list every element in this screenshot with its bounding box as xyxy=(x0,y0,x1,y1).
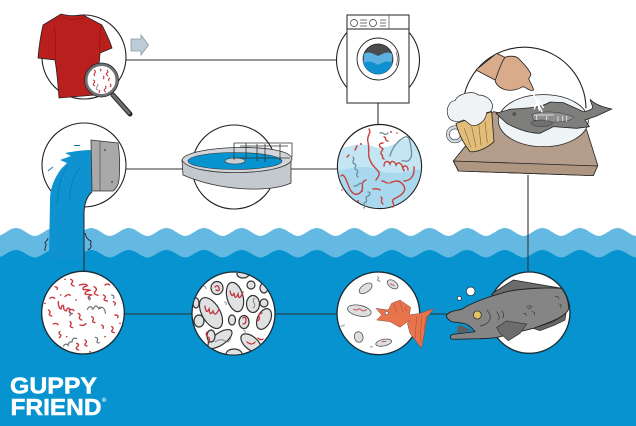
organism cells xyxy=(193,272,272,354)
t-shirt xyxy=(38,14,112,98)
shirt circle xyxy=(42,15,126,99)
tank rim xyxy=(182,147,292,173)
red fibres xyxy=(341,129,414,207)
panel: red t-shirt with magnifier xyxy=(38,14,130,114)
panel: treatment tank xyxy=(182,125,292,209)
tank wall xyxy=(182,150,291,189)
fish on plate xyxy=(496,99,612,133)
hand and arm xyxy=(476,53,534,90)
logo: Guppy Friend xyxy=(10,372,107,420)
grey fibres xyxy=(353,133,412,208)
washer circle xyxy=(336,18,420,102)
centre platform xyxy=(225,158,245,164)
washer door xyxy=(357,38,399,80)
small orange fish xyxy=(376,300,434,348)
shirt seams xyxy=(54,17,101,60)
red fibres xyxy=(48,279,118,350)
large fish circle xyxy=(489,272,570,353)
plate circle xyxy=(465,47,586,108)
pectoral fin xyxy=(497,321,527,341)
plate xyxy=(498,95,588,147)
arm crease xyxy=(495,57,505,80)
arrow icon xyxy=(131,35,148,55)
table xyxy=(453,112,598,176)
fish eye xyxy=(473,311,481,319)
water stream xyxy=(49,150,92,258)
fibres in lens xyxy=(93,69,111,93)
splash squiggles at surface xyxy=(45,233,91,251)
magnifier handle xyxy=(113,95,130,114)
beer foam xyxy=(447,93,492,126)
stream edge line xyxy=(84,192,92,271)
panel: bacteria and plankton xyxy=(192,270,275,359)
plankton cells xyxy=(346,278,400,348)
specks xyxy=(44,278,121,352)
sea circle xyxy=(42,271,124,354)
panel: wastewater pipe xyxy=(42,123,126,271)
logo: Guppy Friend: GUPPY xyxy=(10,372,97,398)
grey fibres xyxy=(63,295,114,346)
panel: washing machine xyxy=(336,15,420,103)
small organism circle xyxy=(337,272,420,355)
panel: microfibres in water xyxy=(335,124,425,212)
stream splash marks xyxy=(48,146,80,171)
water: light wave band xyxy=(0,228,636,270)
bridge frame xyxy=(234,143,292,162)
washer body xyxy=(347,29,409,103)
pipe circle xyxy=(42,123,126,207)
panel: fish on a plate with beer xyxy=(447,47,612,176)
circle background xyxy=(338,124,422,208)
pipe outlet xyxy=(91,140,120,191)
plankton circle xyxy=(192,272,275,355)
pipe details xyxy=(99,141,101,191)
fork xyxy=(531,88,543,112)
bubbles xyxy=(457,287,475,300)
stream inner lines xyxy=(57,165,80,205)
water: deep sea xyxy=(0,250,636,426)
tank water xyxy=(188,152,282,170)
washer control panel xyxy=(347,15,409,29)
large fish xyxy=(447,280,569,341)
logo: Guppy Friend: ® xyxy=(102,397,107,404)
specks xyxy=(341,131,398,202)
fibres in plankton xyxy=(353,283,395,342)
logo: Guppy Friend: FRIEND xyxy=(10,394,101,420)
beer mug xyxy=(447,93,494,152)
connector lines xyxy=(124,60,528,314)
tank circle xyxy=(192,125,276,209)
panel: microfibres in sea xyxy=(42,271,124,354)
magnifier lens xyxy=(86,64,117,96)
mug handle xyxy=(448,127,462,141)
fibres inside cells xyxy=(205,286,263,344)
panel: fish circle with small fish xyxy=(337,272,570,355)
magnifier xyxy=(84,63,130,114)
mug glass xyxy=(456,112,494,152)
